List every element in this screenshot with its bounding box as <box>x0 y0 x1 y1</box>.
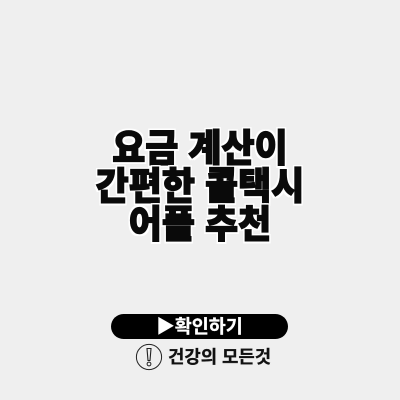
icon: exclamation circle <box>136 344 162 370</box>
button label: ▶확인하기 <box>156 316 243 337</box>
title: 간편한 콜택시 <box>96 165 304 208</box>
title <box>94 127 304 246</box>
button: confirm <box>111 314 288 339</box>
title: 어플 추천 <box>129 203 271 246</box>
title: 요금 계산이 <box>112 127 288 170</box>
caption: 건강의 모든것 <box>168 347 271 367</box>
